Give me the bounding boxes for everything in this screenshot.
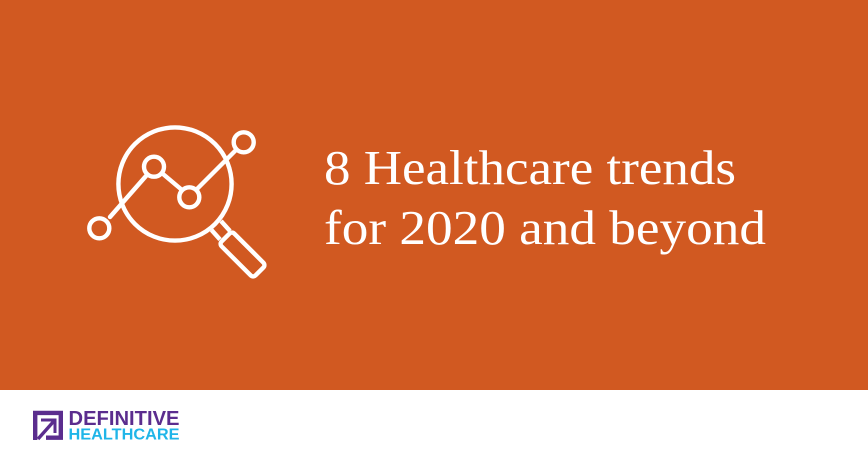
title: 8 Healthcare trends [324,140,736,195]
chart line [110,150,236,217]
icon: logo square with arrow [35,413,61,440]
handle [212,221,266,278]
logo: Definitive Healthcare [35,408,180,444]
lens [118,127,232,241]
chart nodes [89,132,254,238]
logo wordmark: HEALTHCARE [68,426,180,444]
title [324,140,766,255]
icon: magnifying glass over line chart [89,127,266,278]
title: for 2020 and beyond [324,200,766,255]
logo wordmark [68,408,180,444]
logo wordmark: DEFINITIVE [68,408,180,430]
